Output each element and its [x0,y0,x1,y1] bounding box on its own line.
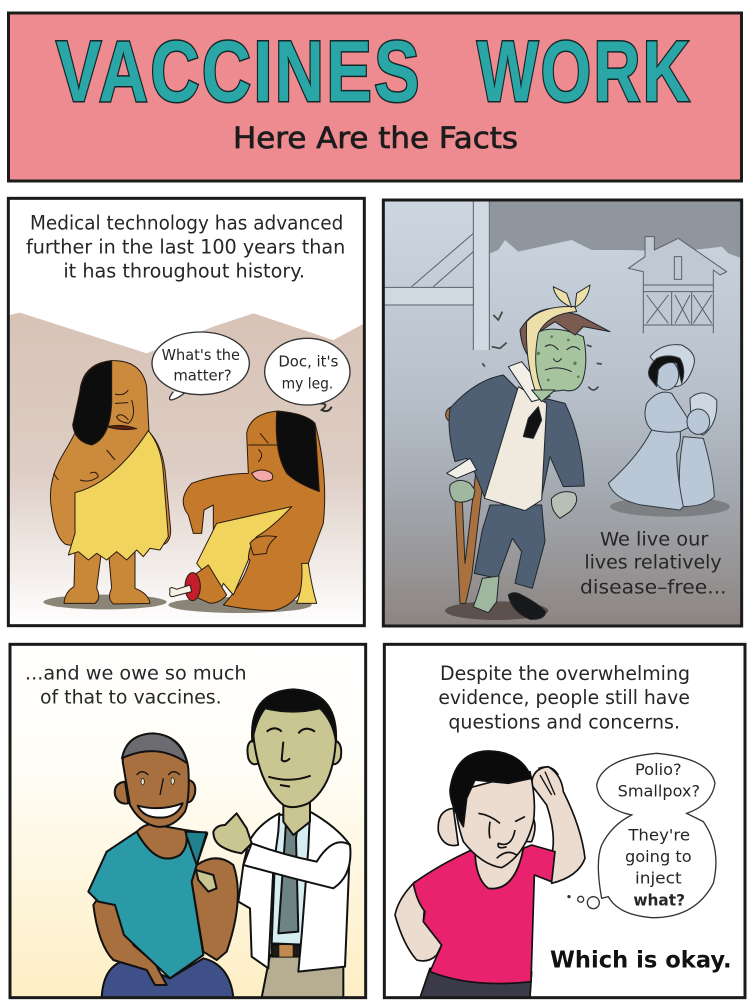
caption: Which is okay.: Which is okay. [550,948,732,974]
caption text [580,529,727,598]
panel: sick man [383,200,742,626]
panel frame [8,198,364,626]
crutch [446,407,507,603]
thought bubble: what? [633,891,685,910]
character: doctor [213,689,350,998]
subheading: Here Are the Facts: Here Are the Facts [233,121,518,155]
panel: doctor and patient [10,644,366,998]
character: worried man [395,751,585,998]
speech bubble: What's the matter? [152,332,249,400]
heading: Vaccines Work: VACCINES [56,24,422,120]
speech bubble: Doc, it's my leg. [265,338,350,411]
panel frame [10,644,366,998]
thought bubble [568,753,716,918]
caption text: evidence, people still have [438,686,690,709]
fence post and beams [383,200,489,350]
speech bubble: Doc, it's my leg.: Doc, it's [278,353,339,371]
character: patient [88,733,238,998]
caption text [25,663,247,708]
thought bubble: Smallpox? [618,781,700,800]
caption text [26,211,345,282]
panel frame [384,644,745,998]
caption text: of that to vaccines. [40,687,222,708]
caption text: Medical technology has advanced [30,211,343,234]
caption text: further in the last 100 years than [26,235,345,258]
caption text: We live our [600,529,709,550]
speech bubble: Doc, it's my leg.: my leg. [282,375,333,393]
character: standing caveman [50,361,171,604]
thought bubble: going to [625,847,692,866]
panel: title banner [8,13,742,181]
ground shadow: man [445,601,548,620]
caption text: ...and we owe so much [25,663,247,684]
speech bubble: What's the matter?: What's the [162,346,240,364]
panel: cavemen [8,198,364,626]
mountains [8,313,364,626]
speech bubble: What's the matter?: matter? [173,367,232,385]
character: seated caveman [170,411,325,611]
caption text: it has throughout history. [63,259,305,282]
panel: worried man [384,644,745,998]
caption text: lives relatively [584,553,722,574]
caption text: disease–free... [580,577,727,598]
caption text: Despite the overwhelming [440,662,690,685]
ground shadow: left caveman [43,595,167,609]
flies [482,312,602,390]
ground shadow: right caveman [168,597,312,613]
thought bubble: They're [627,825,690,844]
thought bubble: inject [635,869,682,888]
character: sick man [446,285,610,619]
farmhouse [628,237,727,333]
background hedge [490,200,742,258]
panel frame [383,200,742,626]
caption text: questions and concerns. [448,710,680,733]
caption text [438,662,690,733]
thought bubble: Polio? [635,760,682,779]
woman and child [608,345,730,517]
